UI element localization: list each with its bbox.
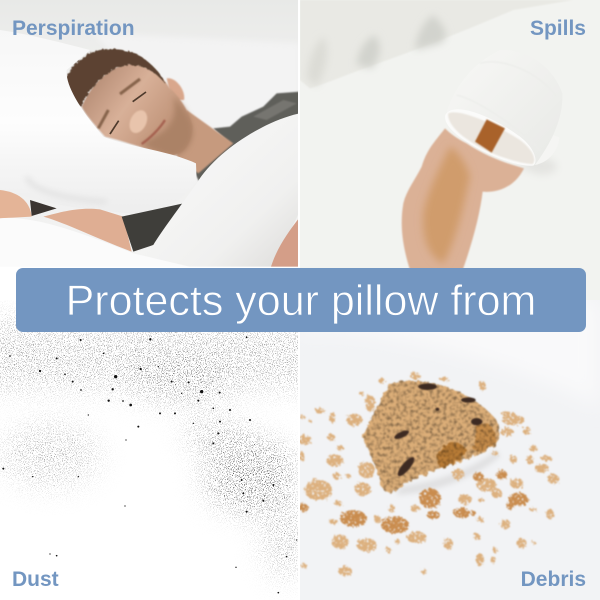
label: Spills: Spills — [530, 17, 586, 40]
panel: debris — [300, 300, 600, 600]
banner: Protects your pillow from — [16, 268, 586, 332]
illustration: tipped white cup with coffee stain — [300, 0, 600, 300]
label: Perspiration: Perspiration — [12, 17, 135, 40]
label: Dust: Dust — [12, 568, 59, 591]
illustration: scattered dust specks — [0, 301, 298, 596]
panel: spills — [300, 0, 600, 300]
label: Debris: Debris — [521, 568, 586, 591]
panel: dust — [0, 301, 298, 596]
illustration: broken cookie and crumbs — [300, 300, 600, 600]
panel: perspiration — [0, 0, 298, 267]
illustration: man sleeping on a white pillow — [0, 0, 298, 267]
banner: Protects your pillow from: Protects your pillow from — [66, 277, 536, 325]
